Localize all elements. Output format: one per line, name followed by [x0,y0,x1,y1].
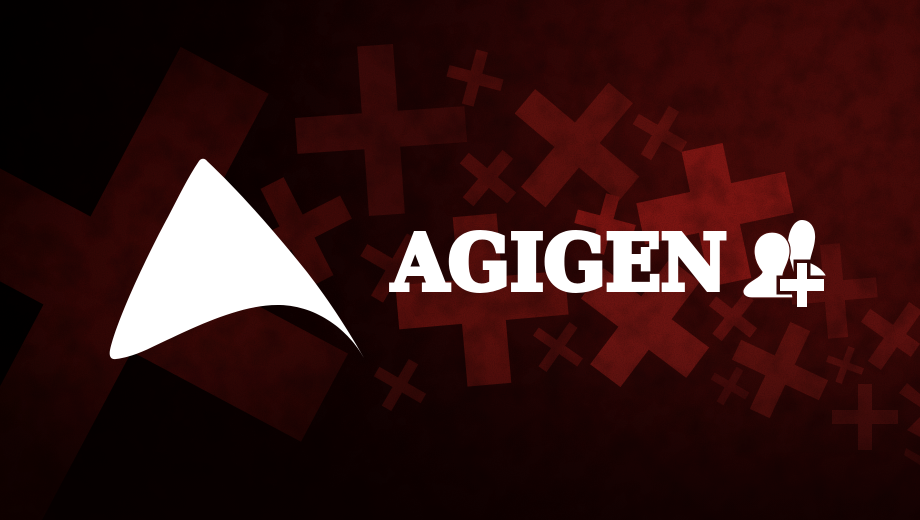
plus sign [780,263,824,307]
icon: two people with plus sign [743,220,827,307]
wordmark: AGIGEN: AGIGEN [391,218,727,308]
two person silhouettes [743,220,827,298]
icon: white sail logo mark [110,159,364,359]
